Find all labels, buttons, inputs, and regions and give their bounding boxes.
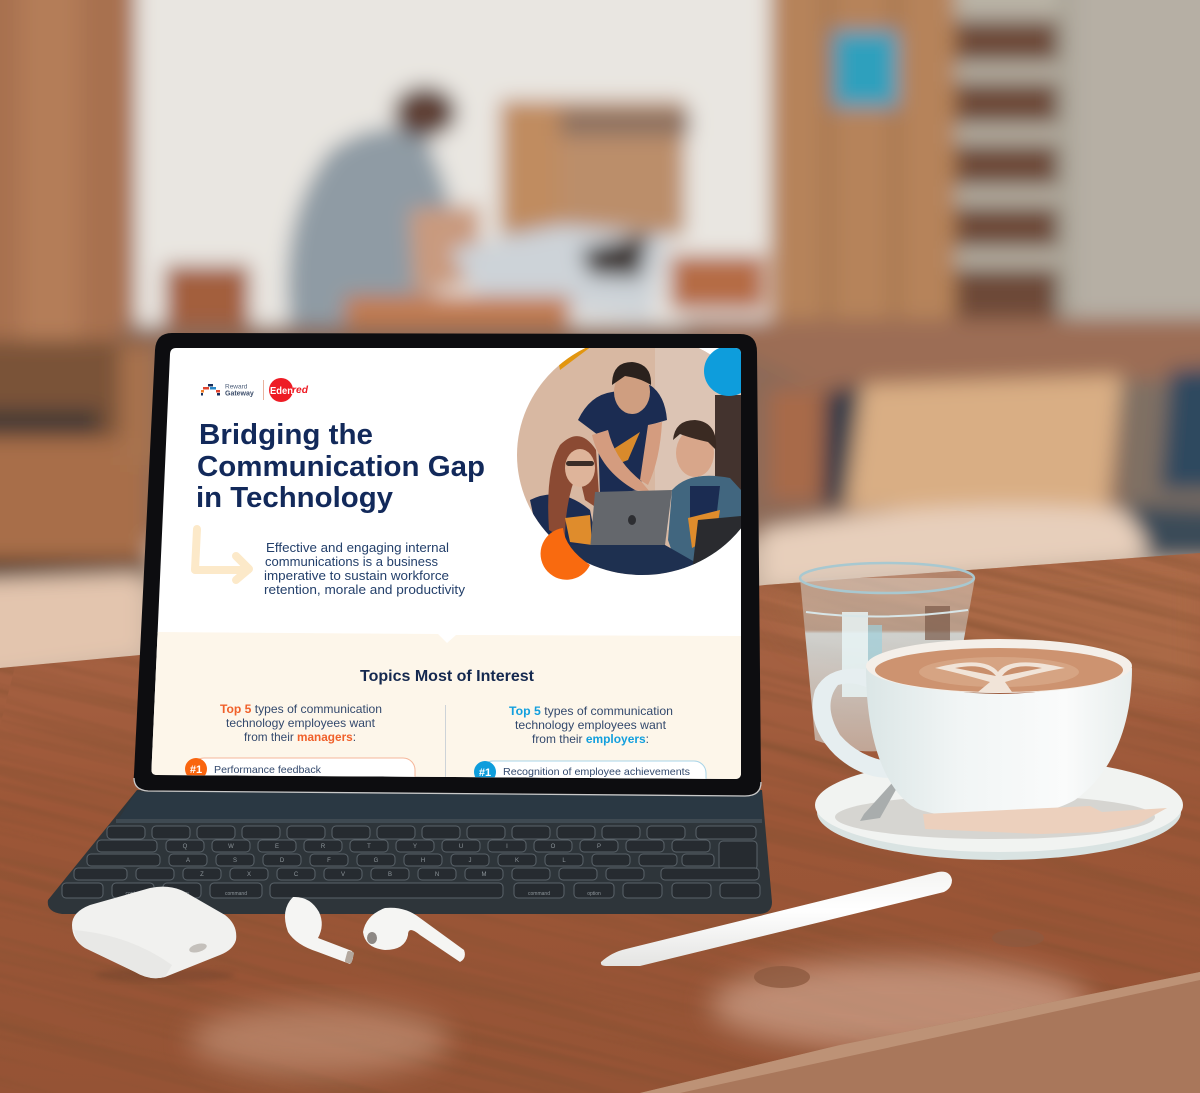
keyboard letter labels: Z [200, 872, 204, 878]
keyboard letter labels: command [225, 891, 247, 897]
keyboard letter labels: L [562, 858, 566, 864]
right column intro [509, 704, 673, 746]
title: Communication Gap [197, 451, 485, 483]
left column intro [220, 702, 382, 744]
coffee cup and saucer [812, 639, 1183, 860]
icon: cream arrow [195, 529, 249, 580]
keyboard letter labels: command [528, 891, 550, 897]
logos: red [292, 385, 309, 396]
airpod right [363, 908, 465, 962]
photo of three colleagues [517, 335, 741, 575]
blurred cafe background [0, 0, 1200, 700]
airpods case [72, 887, 236, 982]
intro paragraph: retention, morale and productivity [264, 583, 466, 597]
logos [201, 378, 309, 402]
latte surface [875, 648, 1123, 692]
column divider [445, 705, 446, 779]
keyboard letter labels: Q [183, 844, 188, 850]
keyboard letter labels: S [233, 858, 237, 864]
standing man [578, 362, 667, 495]
keyboard letter labels: M [482, 872, 486, 878]
keyboard letter labels: D [280, 858, 285, 864]
intro paragraph: Effective and engaging internal [266, 541, 449, 555]
wooden table top [0, 540, 1200, 1093]
left column intro: Top 5 types of communication [220, 702, 382, 716]
keyboard letter labels: R [321, 844, 326, 850]
left column intro: technology employees want [226, 716, 376, 730]
keyboard letter labels: option [175, 891, 189, 897]
keyboard letter labels: I [506, 844, 508, 850]
pill: performance feedback: #1 [190, 764, 202, 776]
keyboard letter labels: P [597, 844, 601, 850]
keyboard letter labels: W [228, 844, 234, 850]
keyboard [48, 790, 772, 914]
laptop [590, 490, 672, 550]
keyboard letter labels: H [421, 858, 425, 864]
sugar packets [923, 806, 1167, 834]
title: in Technology [196, 482, 393, 514]
right column intro: Top 5 types of communication [509, 704, 673, 718]
keyboard letter labels: F [327, 858, 331, 864]
keyboard letter labels: E [275, 844, 279, 850]
logos: Reward [225, 384, 248, 390]
apple pencil [601, 872, 952, 966]
cup handle [812, 669, 892, 778]
airpod left [285, 897, 354, 964]
heading: topics: Topics Most of Interest [360, 668, 535, 685]
intro paragraph: communications is a business [265, 555, 438, 569]
pill: performance feedback: Performance feedback [214, 764, 322, 776]
cup bowl [866, 668, 1132, 818]
keyboard letter labels: J [468, 858, 472, 864]
keyboard letter labels [125, 844, 601, 897]
intro paragraph [264, 541, 466, 597]
intro paragraph: imperative to sustain workforce [264, 569, 449, 583]
keyboard letter labels: B [388, 872, 392, 878]
keyboard letter labels: Y [413, 844, 417, 850]
logos: Eden [270, 386, 293, 397]
tablet [134, 333, 761, 801]
keyboard letter labels: O [551, 844, 556, 850]
seated man [668, 420, 741, 575]
pill: recognition of employee achievements [474, 760, 706, 779]
keyboard letter labels: option [587, 891, 601, 897]
keyboard letter labels: U [459, 844, 463, 850]
orange circle [541, 528, 590, 580]
title: Bridging the [199, 419, 373, 451]
right column intro: technology employees want [515, 718, 667, 732]
logos: Gateway [225, 390, 254, 398]
keyboard letter labels: N [435, 872, 439, 878]
keyboard letter labels: T [367, 844, 371, 850]
legs and second laptop [586, 545, 696, 575]
woman [530, 436, 600, 570]
pill: recognition of employee achievements: Recognition of employee achievements [503, 766, 690, 778]
spoon [860, 783, 898, 821]
left column intro: from their managers: [244, 730, 356, 744]
tablet screen infographic [150, 335, 754, 801]
keyboard letter labels: X [247, 872, 251, 878]
saucer [815, 758, 1183, 860]
keyboard letter labels: G [374, 858, 379, 864]
keyboard letter labels: control [125, 891, 141, 897]
pill: recognition of employee achievements: #1 [479, 767, 491, 779]
title [196, 419, 485, 514]
keyboard letter labels: K [515, 858, 519, 864]
cream topics band [150, 632, 742, 779]
blue circle [704, 348, 741, 396]
keyboard letter labels: A [186, 858, 190, 864]
keyboard letter labels: C [294, 872, 299, 878]
right column intro: from their employers: [532, 732, 649, 746]
pill: performance feedback [185, 758, 416, 777]
keyboard letter labels: V [341, 872, 345, 878]
glass of water [800, 563, 975, 751]
